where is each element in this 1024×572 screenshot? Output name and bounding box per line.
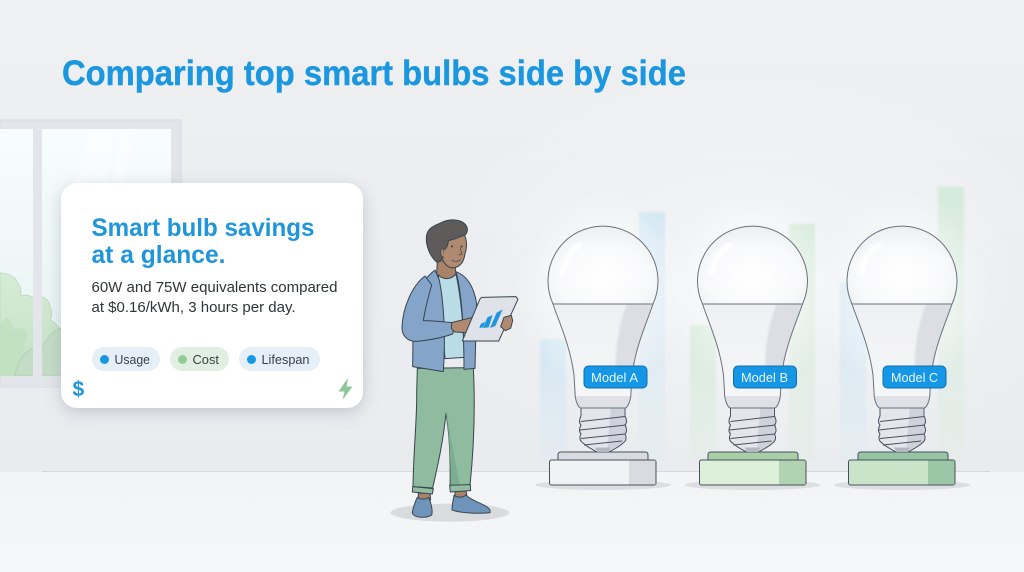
legend pill: lifespan: Lifespan: [262, 352, 310, 367]
label C: [883, 366, 946, 388]
label A: [584, 366, 647, 388]
base shadow: [684, 480, 820, 490]
card heading: at a glance.: [92, 241, 226, 269]
bar: model B savings: [789, 224, 815, 461]
label B: Model B: [741, 370, 788, 385]
bar: model C usage: [840, 282, 866, 461]
card heading: Smart bulb savings: [92, 214, 314, 242]
bulb: model A: [535, 226, 671, 490]
platform A: [550, 452, 656, 485]
label A: Model A: [591, 370, 638, 385]
base shadow: [535, 480, 671, 490]
card description: [92, 280, 338, 316]
base shadow: [834, 480, 970, 490]
legend pill: usage: Usage: [114, 352, 150, 367]
legend pill: usage: [92, 347, 160, 371]
bar: model A usage: [540, 339, 566, 461]
card heading: [92, 214, 314, 269]
bulb: model B: [684, 226, 820, 490]
title: Comparing top smart bulbs side by side: [62, 54, 686, 93]
platform B: [700, 452, 806, 485]
bulb shape C: [847, 226, 957, 452]
card description: 60W and 75W equivalents compared: [92, 280, 338, 296]
legend pill: cost: Cost: [192, 352, 219, 367]
platform C: [848, 452, 955, 485]
icon: lightning bolt: [338, 378, 352, 400]
bulb: model C: [834, 226, 970, 490]
bulb shape B: [698, 226, 808, 452]
legend pill: cost: [170, 347, 229, 371]
bar: model B cost: [690, 325, 716, 461]
bar: model A lifespan: [639, 212, 665, 461]
bulb shape A: [548, 226, 658, 452]
window: [0, 120, 181, 387]
legend pill: lifespan: [239, 347, 320, 371]
person with tablet: [391, 220, 518, 522]
floor: [0, 472, 1024, 572]
glow behind bulbs: [515, 190, 990, 390]
label C: Model C: [891, 370, 938, 385]
panel: summary card: [61, 183, 363, 408]
icon: dollar: $: [72, 378, 84, 401]
card description: at $0.16/kWh, 3 hours per day.: [92, 300, 296, 316]
bar: model C savings: [938, 187, 964, 461]
label B: [734, 366, 796, 388]
